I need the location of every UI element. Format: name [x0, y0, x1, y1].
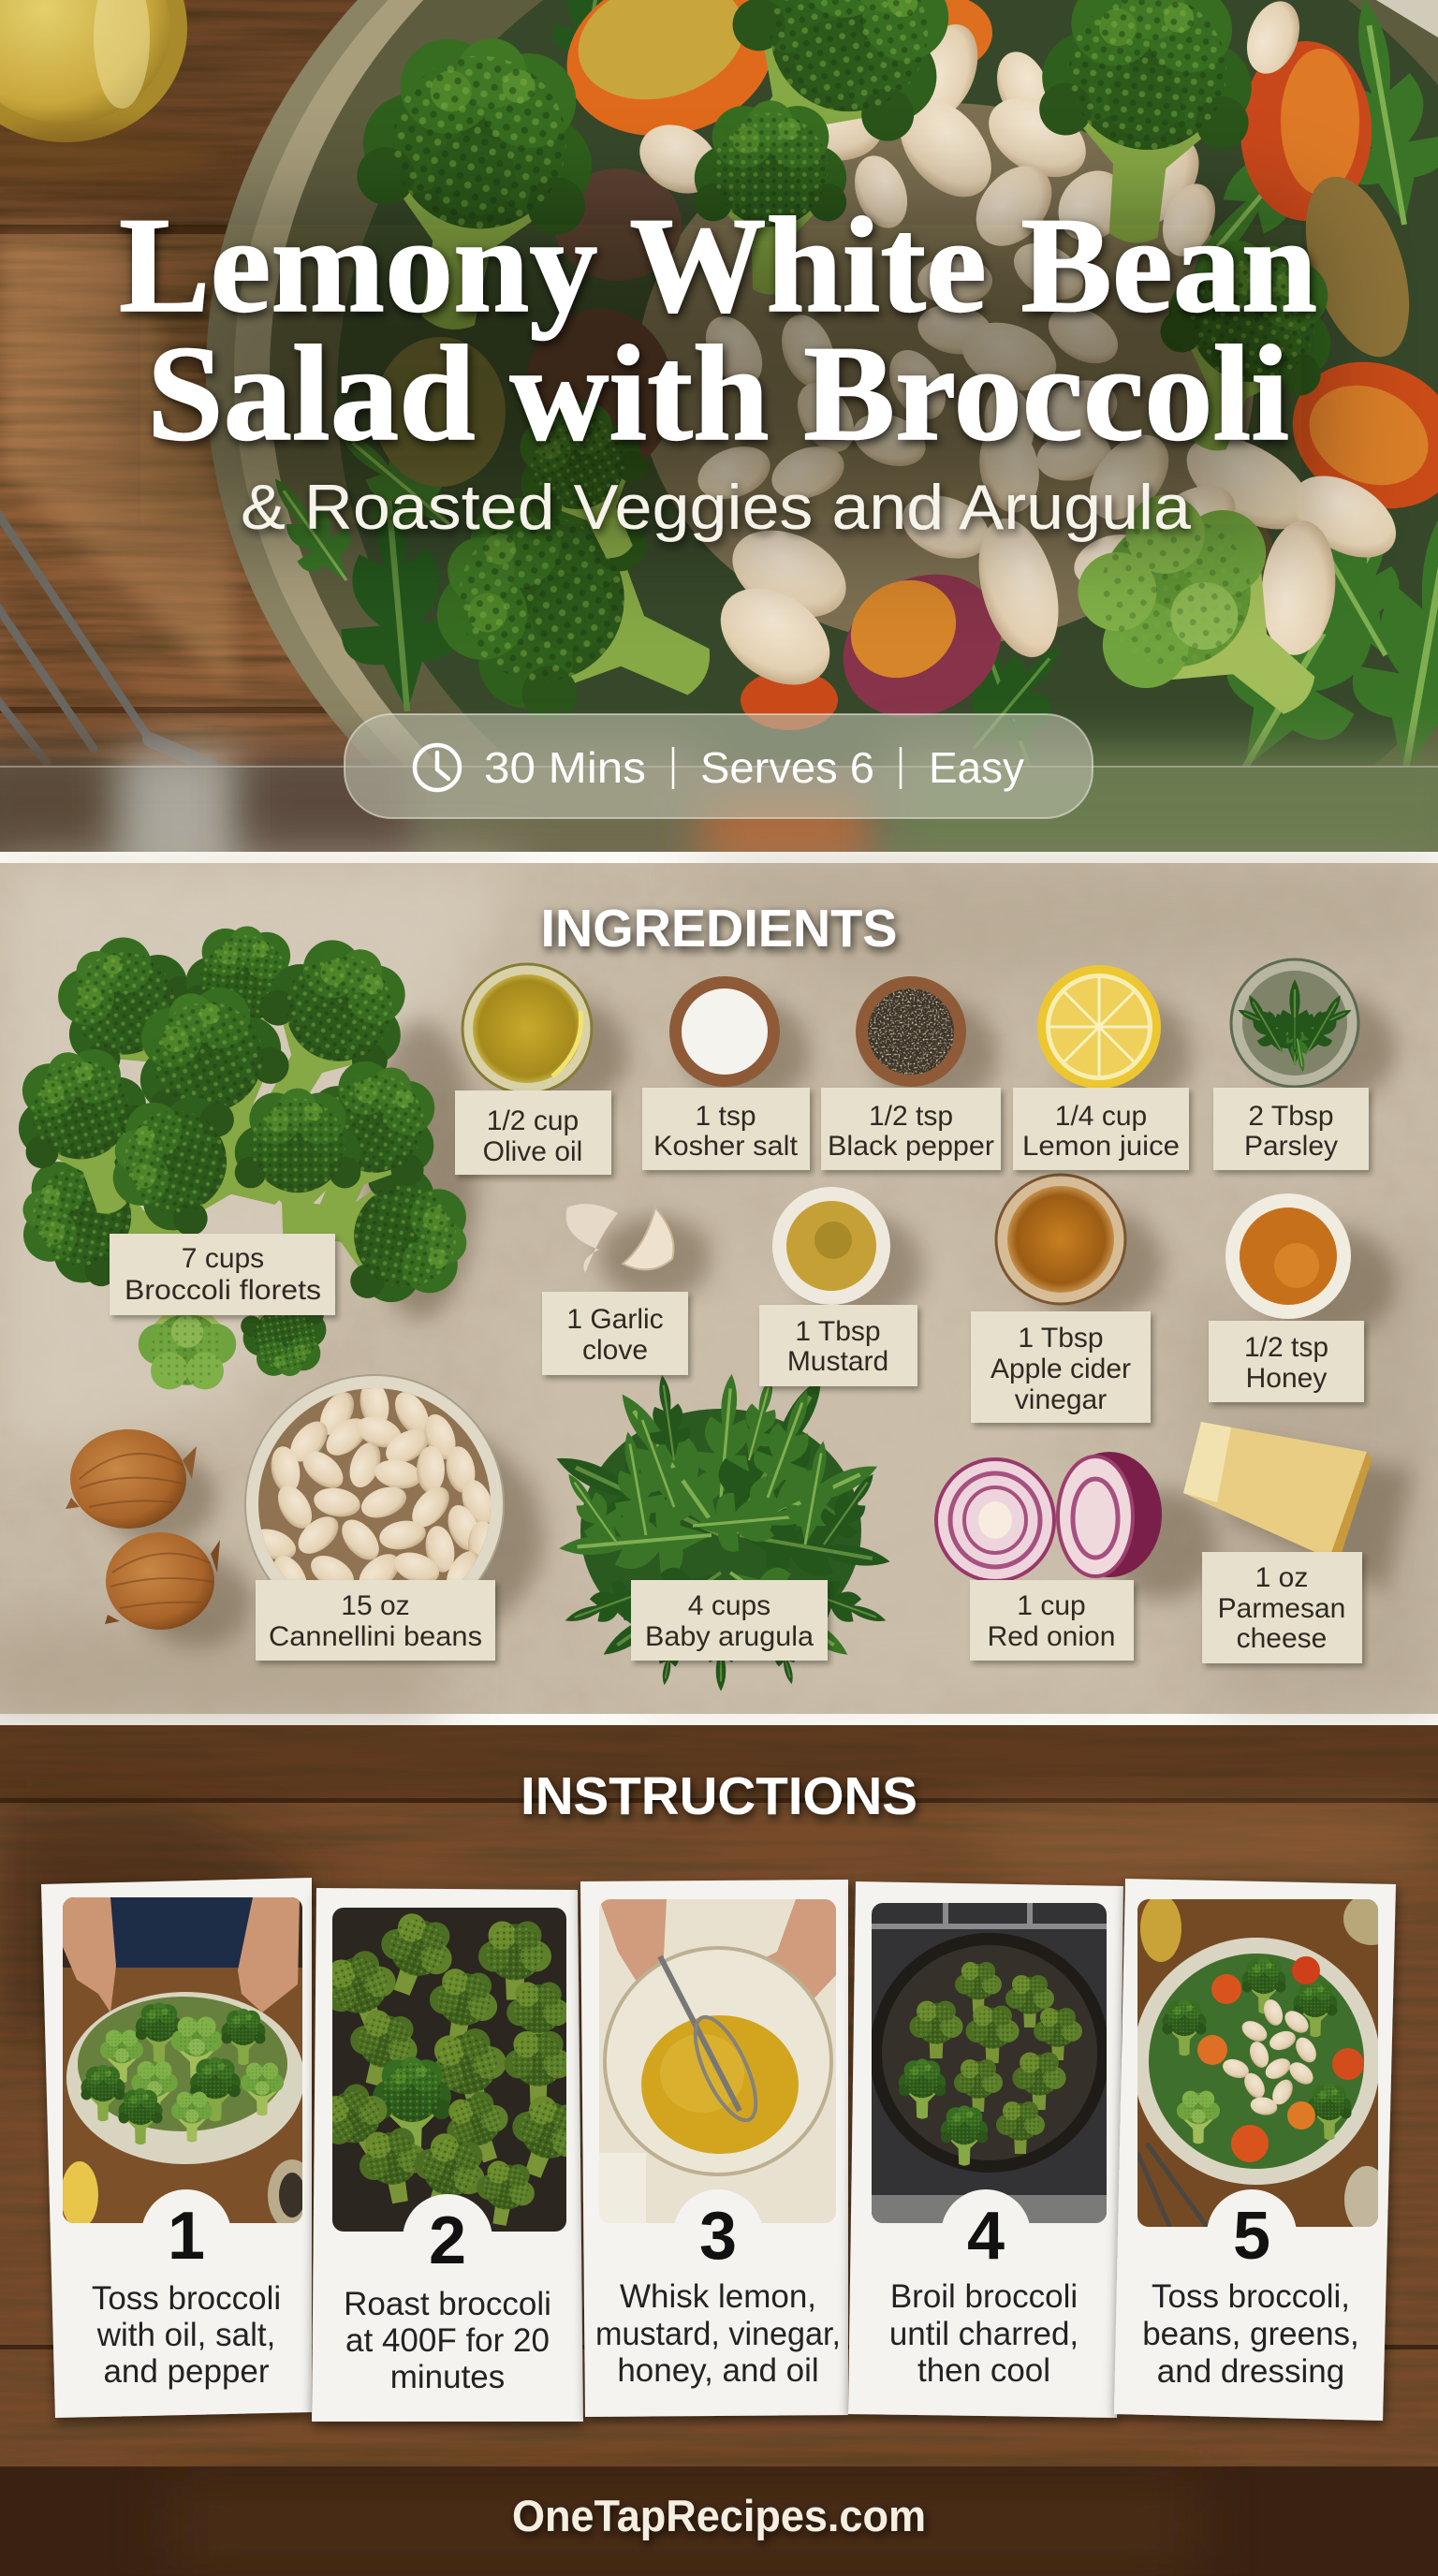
- step 5 text: [1142, 2278, 1359, 2390]
- step 1 photo: tossing broccoli: [56, 1891, 316, 2231]
- heading: INSTRUCTIONS: [521, 1766, 917, 1826]
- label: baby arugula: 4 cups: [688, 1590, 770, 1621]
- step 4 text: [889, 2278, 1078, 2389]
- heading: INGREDIENTS: [541, 899, 897, 959]
- panel: hero: [0, 0, 1438, 852]
- step 3 photo: whisking dressing: [594, 1895, 843, 2228]
- stone background: [0, 863, 1438, 1722]
- label: kosher salt: [642, 1088, 810, 1170]
- step 4 photo: broiling broccoli: [866, 1900, 1111, 2228]
- label: garlic: clove: [582, 1335, 648, 1366]
- pill: Easy: Easy: [929, 743, 1024, 792]
- step 3 text: Whisk lemon,: [620, 2278, 816, 2315]
- ingredient: black pepper bowl: [856, 976, 966, 1087]
- subtitle: & Roasted Veggies and Arugula: [241, 472, 1191, 543]
- label: apple cider vinegar: Apple cider: [990, 1354, 1131, 1384]
- label: olive oil: Olive oil: [483, 1136, 582, 1167]
- blurred bottom band: [0, 749, 1438, 871]
- title: Salad with Broccoli: [147, 317, 1289, 469]
- label: apple cider vinegar: 1 Tbsp: [1018, 1323, 1104, 1354]
- step 1 text: with oil, salt,: [96, 2317, 275, 2353]
- step 4 text: Broil broccoli: [890, 2278, 1078, 2315]
- label: apple cider vinegar: vinegar: [1015, 1384, 1107, 1415]
- step 5 text: Toss broccoli,: [1152, 2278, 1350, 2315]
- broccoli florets: [333, 0, 1371, 779]
- label: olive oil: [455, 1090, 611, 1175]
- ingredient labels: [110, 1088, 1369, 1663]
- step card 5: [1114, 1879, 1400, 2421]
- number badge 3: [673, 2189, 763, 2279]
- step 3 text: [595, 2278, 841, 2389]
- wood background: [0, 1725, 1438, 2576]
- label: parsley: Parsley: [1244, 1131, 1338, 1162]
- ingredient: bowl of cannellini beans: [245, 1375, 504, 1633]
- roasted vegetables: [374, 0, 1438, 745]
- panel: ingredients: [0, 863, 1438, 1722]
- label: cannellini beans: Cannellini beans: [269, 1621, 482, 1652]
- label: lemon juice: Lemon juice: [1022, 1131, 1180, 1162]
- icon: glass of olive oil: [0, 0, 187, 166]
- label: mustard: 1 Tbsp: [795, 1316, 881, 1347]
- label: broccoli florets: Broccoli florets: [125, 1275, 321, 1306]
- ingredient: lemon: [1037, 965, 1161, 1089]
- label: honey: Honey: [1246, 1363, 1327, 1394]
- white beans: [627, 0, 1410, 705]
- label: apple cider vinegar: [971, 1311, 1151, 1423]
- title: [119, 189, 1317, 469]
- step 1 text: Toss broccoli: [92, 2280, 281, 2317]
- step 4 text: then cool: [917, 2352, 1050, 2389]
- label: parmesan cheese: cheese: [1237, 1623, 1327, 1654]
- dark scrim behind title: [140, 225, 1301, 524]
- number badge 3: 3: [699, 2199, 737, 2274]
- step 5 text: beans, greens,: [1142, 2316, 1359, 2352]
- label: garlic: 1 Garlic: [566, 1304, 664, 1335]
- step 3 text: honey, and oil: [617, 2352, 819, 2389]
- number badge 2: [403, 2194, 492, 2284]
- step card 3: [580, 1880, 848, 2417]
- number badge 2: 2: [429, 2203, 466, 2278]
- pill: Serves 6: Serves 6: [700, 743, 874, 792]
- ingredient: olive oil bowl: [462, 964, 592, 1093]
- label: lemon juice: [1013, 1088, 1189, 1170]
- info pill: [345, 714, 1093, 818]
- wood table: [0, 0, 373, 766]
- icon: fork: [0, 510, 211, 766]
- step card 1: [41, 1878, 316, 2418]
- label: parmesan cheese: 1 oz: [1255, 1562, 1308, 1593]
- label: broccoli florets: 7 cups: [182, 1243, 264, 1274]
- label: olive oil: 1/2 cup: [487, 1105, 579, 1136]
- label: baby arugula: Baby arugula: [645, 1621, 814, 1652]
- step 3 text: mustard, vinegar,: [595, 2316, 841, 2352]
- label: baby arugula: [631, 1580, 828, 1661]
- label: red onion: [970, 1580, 1134, 1661]
- label: black pepper: [821, 1088, 1001, 1170]
- label: kosher salt: 1 tsp: [695, 1101, 756, 1132]
- step 2 photo: roasted broccoli: [310, 1900, 594, 2237]
- label: red onion: 1 cup: [1017, 1590, 1086, 1621]
- label: broccoli florets: [110, 1234, 335, 1315]
- step 5 text: and dressing: [1157, 2353, 1344, 2390]
- salad greens base: [251, 0, 1438, 917]
- label: black pepper: 1/2 tsp: [869, 1101, 953, 1132]
- label: mustard: [759, 1305, 917, 1386]
- number badge 5: 5: [1233, 2199, 1270, 2274]
- step card 2: [310, 1888, 594, 2422]
- ingredient: red onion: [936, 1452, 1162, 1581]
- step 2 text: [344, 2286, 551, 2395]
- step 1 text: and pepper: [103, 2353, 270, 2390]
- step 2 text: Roast broccoli: [344, 2286, 551, 2322]
- ingredient: honey bowl: [1225, 1193, 1351, 1319]
- label: mustard: Mustard: [787, 1346, 888, 1377]
- ingredient: parsley bowl: [1231, 959, 1358, 1087]
- ingredient: mustard bowl: [772, 1187, 890, 1305]
- label: lemon juice: 1/4 cup: [1055, 1101, 1147, 1132]
- number badge 5: [1207, 2189, 1297, 2279]
- label: garlic: [542, 1292, 688, 1375]
- number badge 4: 4: [967, 2199, 1005, 2274]
- pill: 30 Mins: 30 Mins: [484, 743, 646, 792]
- salad bowl: [206, 0, 1438, 766]
- ingredient: vinegar bowl: [996, 1175, 1125, 1304]
- ingredient: shallots: [66, 1429, 220, 1630]
- footer website: OneTapRecipes.com: [512, 2491, 926, 2540]
- label: parsley: 2 Tbsp: [1248, 1101, 1334, 1132]
- label: kosher salt: Kosher salt: [653, 1131, 799, 1162]
- label: red onion: Red onion: [988, 1621, 1115, 1652]
- ingredient: garlic cloves: [566, 1204, 674, 1273]
- ingredient: broccoli pile: [0, 912, 478, 1389]
- icon: clock: [415, 745, 460, 790]
- number badge 1: [141, 2189, 231, 2279]
- number badge 1: 1: [168, 2199, 205, 2274]
- step 2 text: at 400F for 20: [345, 2322, 550, 2359]
- label: cannellini beans: 15 oz: [341, 1590, 410, 1621]
- object shadows: [101, 992, 1414, 1647]
- label: parsley: [1213, 1088, 1369, 1170]
- ingredient: baby arugula: [538, 1356, 896, 1691]
- step 4 text: until charred,: [889, 2316, 1078, 2352]
- label: black pepper: Black pepper: [828, 1131, 994, 1162]
- number badge 4: [941, 2189, 1031, 2279]
- label: cannellini beans: [256, 1580, 495, 1661]
- label: parmesan cheese: Parmesan: [1218, 1593, 1345, 1624]
- step 2 text: minutes: [390, 2359, 505, 2395]
- label: honey: 1/2 tsp: [1244, 1332, 1328, 1363]
- step 5 photo: finished salad: [1133, 1893, 1400, 2233]
- ingredient: parmesan wedge: [1183, 1422, 1372, 1561]
- title: Lemony White Bean: [119, 189, 1317, 341]
- label: parmesan cheese: [1202, 1552, 1362, 1663]
- ingredient: kosher salt bowl: [669, 976, 780, 1087]
- panel: instructions: [0, 1725, 1438, 2576]
- footer band: [0, 2466, 1438, 2576]
- label: honey: [1209, 1321, 1364, 1402]
- step card 4: [848, 1881, 1123, 2418]
- step 1 text: [92, 2280, 281, 2390]
